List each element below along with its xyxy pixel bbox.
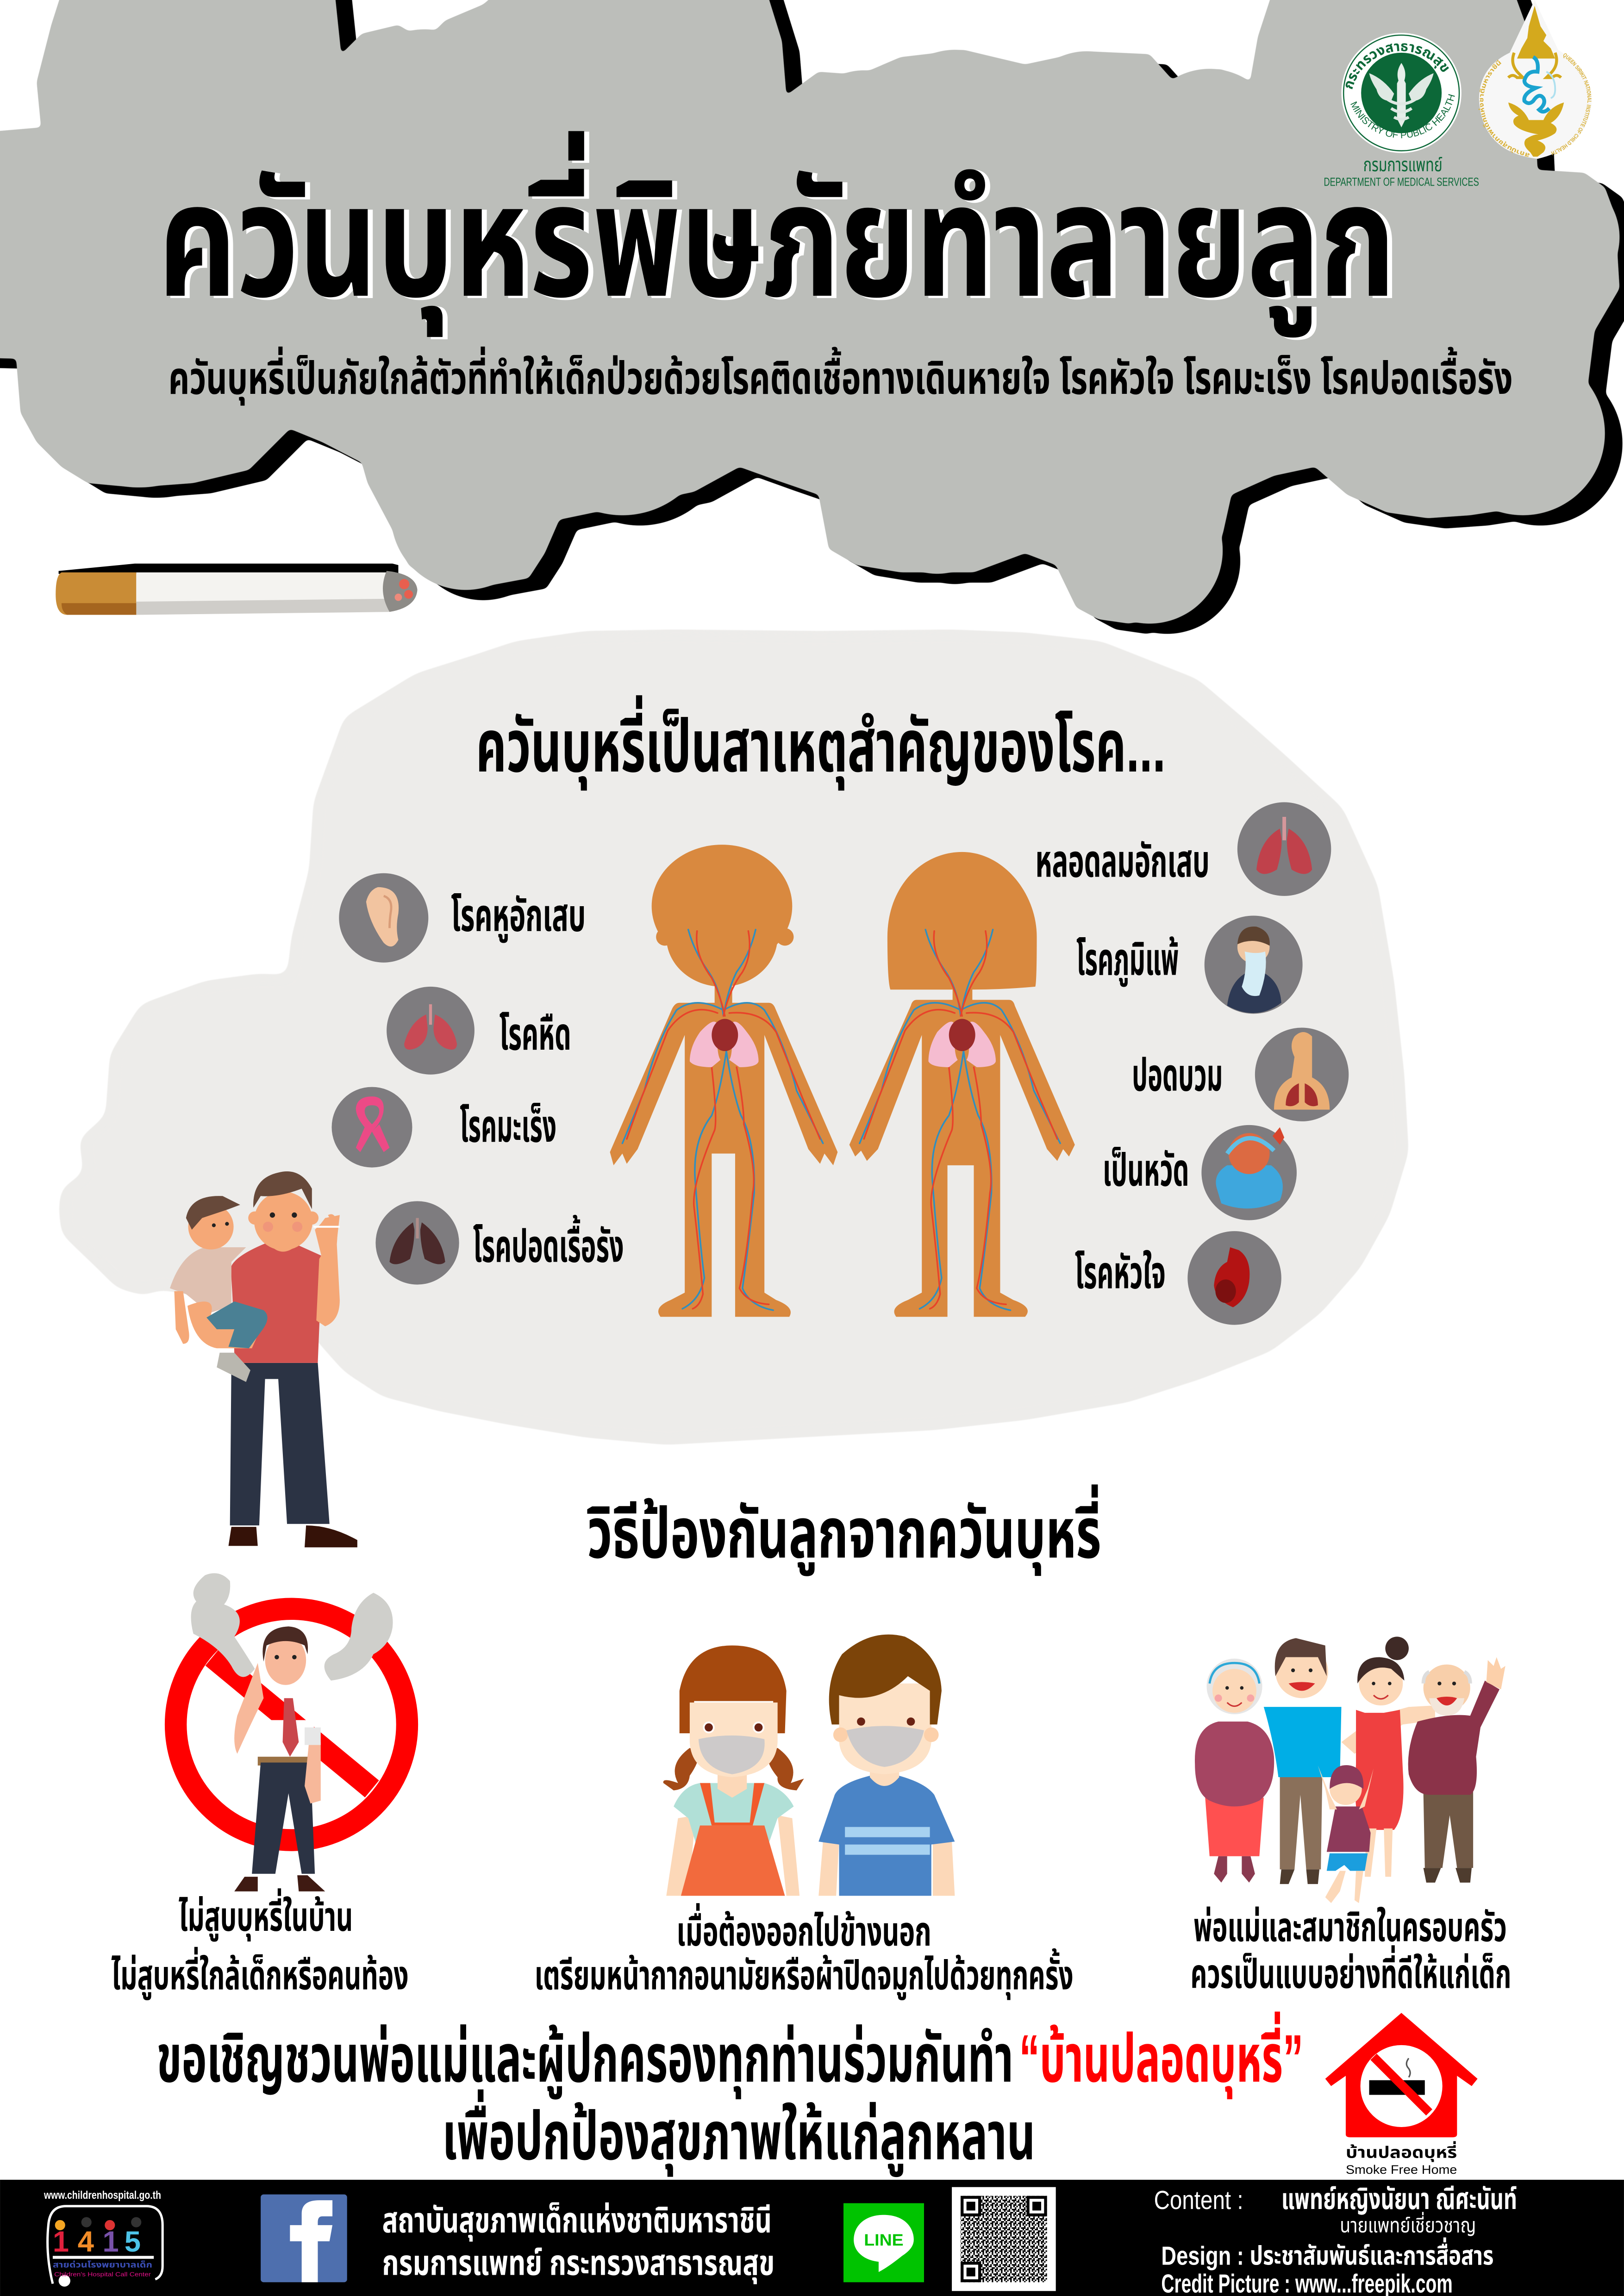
caption: no smoking at home: [111, 1888, 409, 2001]
icon: LINE: [843, 2203, 924, 2282]
call to action text: [157, 2011, 1303, 2178]
logo: 1415 call center: [48, 2206, 162, 2287]
icon: LINE: LINE: [864, 2232, 904, 2249]
chart: boy body silhouette: [610, 845, 837, 1317]
logo: 1415 call center: 4: [78, 2226, 94, 2258]
icon: smoke free home: [1325, 2013, 1478, 2177]
logo: Ministry of Public Health: [1341, 33, 1462, 153]
logo: Ministry of Public Health: กระทรวงสาธารณสุข: [1341, 39, 1453, 91]
icon: facebook: [261, 2194, 347, 2282]
label: pneumonia: ปอดบวม: [1132, 1050, 1223, 1101]
icon: smoke free home: Smoke Free Home: [1346, 2163, 1457, 2177]
icon: allergy person: [1205, 916, 1303, 1014]
logo: 1415 call center: 1: [53, 2226, 69, 2258]
icon: burning cigarette: [56, 564, 418, 615]
label: common cold: เป็นหวัด: [1103, 1145, 1189, 1195]
logo: Department of Medical Services caption: DEPARTMENT OF MEDICAL SERVICES: [1324, 176, 1479, 189]
icon: pink ribbon: [332, 1087, 412, 1168]
illustration: family: [1195, 1636, 1505, 1903]
icon: heart: [1187, 1231, 1281, 1325]
organization name: สถาบันสุขภาพเด็กแห่งชาติมหาราชินี: [382, 2201, 772, 2242]
icon: pneumonia torso: [1255, 1027, 1349, 1121]
call to action text: ขอเชิญชวนพ่อแม่และผู้ปกครองทุกท่านร่วมกันทำ: [157, 2021, 1013, 2100]
caption: no smoking at home: ไม่สูบบุหรี่ในบ้าน: [179, 1888, 353, 1942]
logo: Ministry of Public Health: MINISTRY OF PUBLIC HEALTH: [1348, 93, 1457, 141]
icon: common cold child: [1201, 1125, 1297, 1220]
credits: นายแพทย์เชี่ยวชาญ: [1340, 2212, 1476, 2237]
website url: www.childrenhospital.go.th: [44, 2190, 161, 2202]
icon: chronic lung disease: [375, 1201, 459, 1285]
smoke cloud banner: [0, 0, 1624, 634]
caption: wear a mask outside: [535, 1903, 1074, 2001]
organization name: กรมการแพทย์ กระทรวงสาธารณสุข: [382, 2243, 775, 2284]
logo: 1415 call center: Children's Hospital Call Center: [54, 2271, 151, 2278]
label: asthma: โรคหืด: [500, 1008, 571, 1059]
label: bronchitis: หลอดลมอักเสบ: [1035, 836, 1210, 887]
caption: wear a mask outside: เตรียมหน้ากากอนามัยหรือผ้าปิดจมูกไปด้วยทุกครั้ง: [535, 1948, 1074, 2001]
logo: Queen Sirikit National Institute of Child Health: QUEEN SIRIKIT NATIONAL INSTITUTE OF CHILD HEALTH: [1550, 52, 1593, 156]
logo: Department of Medical Services caption: กรมการแพทย์: [1363, 154, 1443, 175]
credits: Content :: [1154, 2185, 1243, 2215]
logo: 1415 call center: สายด่วนโรงพยาบาลเด็ก: [53, 2260, 152, 2270]
footer bar: [0, 2180, 1624, 2296]
label: allergy: โรคภูมิแพ้: [1076, 934, 1179, 987]
label: cancer: โรคมะเร็ง: [460, 1101, 556, 1151]
credits: แพทย์หญิงนัยนา ณีศะนันท์: [1281, 2183, 1517, 2215]
label: ear inflammation: โรคหูอักเสบ: [451, 890, 586, 943]
logo: Queen Sirikit National Institute of Child Health: [1477, 0, 1593, 160]
chart: girl body silhouette: [849, 852, 1075, 1317]
caption: wear a mask outside: เมื่อต้องออกไปข้างนอก: [676, 1903, 931, 1954]
illustration: no smoking sign with man: [176, 1573, 407, 1892]
call to action text: เพื่อปกป้องสุขภาพให้แก่ลูกหลาน: [442, 2090, 1035, 2178]
credits: Design : ประชาสัมพันธ์และการสื่อสาร: [1161, 2237, 1493, 2271]
illustration: children wearing masks: [663, 1635, 955, 1896]
caption: no smoking at home: ไม่สูบหรี่ใกล้เด็กหรือคนท้อง: [111, 1947, 409, 2001]
logo: 1415 call center: 5: [125, 2226, 141, 2258]
label: chronic lung disease: โรคปอดเรื้อรัง: [473, 1215, 624, 1272]
icon: bronchitis lungs: [1237, 802, 1331, 896]
panel: diseases cloud: [59, 629, 1409, 1445]
icon: ear: [339, 873, 428, 963]
label: heart disease: โรคหัวใจ: [1075, 1247, 1166, 1298]
logo: 1415 call center: 1: [102, 2226, 119, 2258]
heading: how to protect: วิธีป้องกันลูกจากควันบุหรี่: [587, 1484, 1101, 1576]
icon: asthma lungs: [387, 987, 475, 1075]
QR code: [952, 2187, 1056, 2291]
credits: [1154, 2183, 1517, 2296]
call to action text: “บ้านปลอดบุหรี่”: [1019, 2011, 1303, 2099]
logo: Queen Sirikit National Institute of Child Health: สถาบันสุขภาพเด็กแห่งชาติมหาราชินี: [1477, 59, 1530, 160]
logo: Department of Medical Services caption: [1324, 154, 1479, 189]
illustration: father smoking holding child: [170, 1171, 357, 1547]
icon: smoke free home: บ้านปลอดบุหรี่: [1346, 2140, 1457, 2162]
organization name: [382, 2201, 775, 2284]
heading: causes: ควันบุหรี่เป็นสาเหตุสำคัญของโรค...: [476, 695, 1166, 790]
caption: family as role models: [1191, 1904, 1511, 1997]
